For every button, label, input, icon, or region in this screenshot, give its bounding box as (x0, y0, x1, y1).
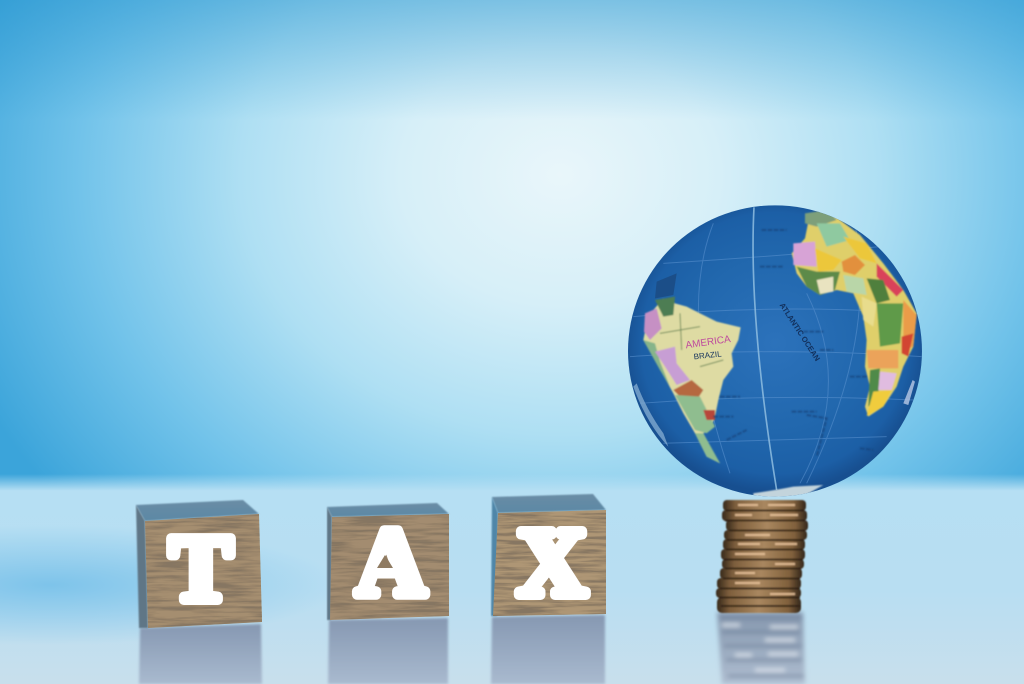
label: ATLANTIC OCEAN: ATLANTIC OCEAN (778, 301, 822, 363)
globe sphere (628, 205, 922, 497)
block T top face (136, 500, 259, 521)
continent: North America fragment (655, 273, 677, 298)
block X front face (493, 510, 606, 616)
letter A counter (377, 555, 393, 568)
Madagascar (903, 380, 915, 405)
label: BRAZIL: BRAZIL (693, 349, 723, 361)
letter T: T (170, 517, 232, 621)
block A with letter (327, 503, 449, 620)
background: blue studio wall with central glow (0, 0, 1024, 510)
Antarctica strip at lower left (633, 383, 668, 447)
reflection: block T (139, 624, 262, 684)
reflection: block A (328, 618, 448, 684)
coin stack reflection (717, 612, 805, 684)
block X with letter (491, 494, 606, 616)
block A front face (330, 514, 449, 620)
globe (628, 205, 922, 498)
letter X: X (517, 509, 587, 616)
floor: pale reflective surface (0, 474, 1024, 684)
block X side face (491, 497, 498, 616)
coin stack (716, 500, 808, 613)
ocean markings (713, 230, 873, 457)
label: AMERICA: AMERICA (685, 334, 732, 351)
latitude and longitude lines (630, 217, 922, 483)
letter A: A (356, 509, 426, 616)
block X top face (492, 494, 606, 513)
block T front face (145, 514, 262, 628)
block A side face (327, 507, 332, 620)
continent: Africa (792, 210, 917, 417)
block A top face (327, 503, 449, 517)
block T side face (136, 505, 148, 628)
continent: South America (643, 297, 741, 463)
globe contents clipped to sphere (630, 207, 922, 498)
globe bottom highlight (753, 485, 823, 498)
seam meridian (753, 207, 777, 490)
block T with letter (136, 500, 262, 628)
reflection: block X (491, 615, 605, 684)
